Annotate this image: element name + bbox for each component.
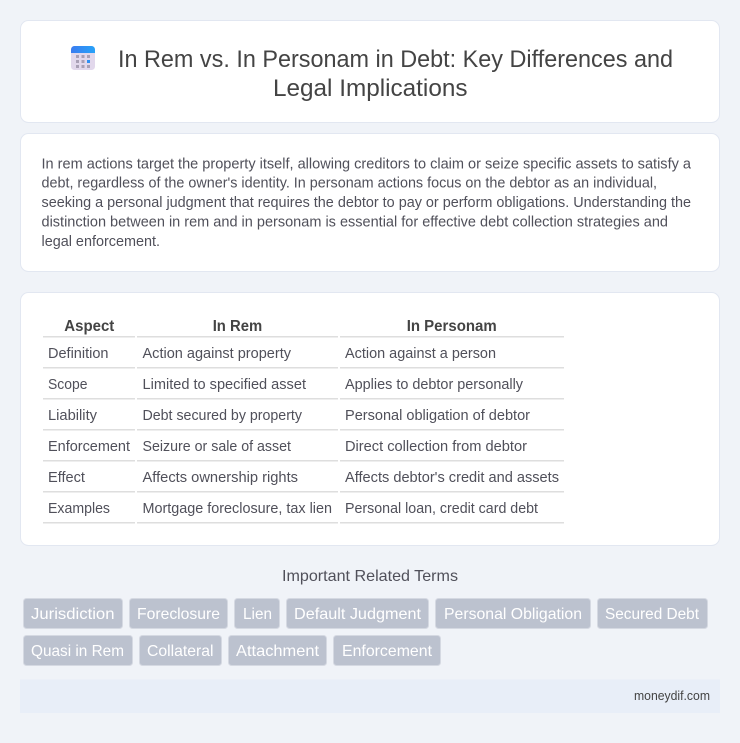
table header row: In Personam [407,318,497,335]
tag: personal obligation: Personal Obligation [444,606,582,623]
tag: attachment: Attachment [236,643,320,660]
table row: liability: Liability [48,408,98,424]
tag: jurisdiction: Jurisdiction [31,606,114,623]
table row: liability: Debt secured by property [142,408,303,424]
table header row [64,318,497,335]
tag: collateral [140,636,222,666]
table row: examples: Mortgage foreclosure, tax lien [142,501,332,517]
text block: introduction paragraph [42,156,691,250]
table row: scope: Applies to debtor personally [345,377,524,393]
tag: secured debt: Secured Debt [605,606,700,623]
footer credit: moneydif.com [634,689,710,703]
tag: personal obligation [436,598,590,628]
table row: examples [48,501,538,517]
tag: lien: Lien [243,606,272,623]
title [118,46,673,102]
tag: quasi in rem [24,636,132,666]
tag: enforcement [334,636,440,666]
panel: comparison table [20,292,720,546]
table header row: In Rem [213,318,262,335]
table row: scope: Limited to specified asset [142,377,306,393]
table row: examples: Personal loan, credit card debt [345,501,538,517]
tag: secured debt [598,598,708,628]
text block: introduction paragraph: legal enforcement. [42,234,160,250]
tag: default judgment: Default Judgment [294,606,422,623]
footer bar [20,680,720,713]
table row: effect [48,470,559,486]
table row: scope [48,377,524,393]
panel: related term tags [24,598,708,666]
text block: introduction paragraph: seeking a personal judgment that requires the debtor to pay or perform obligations. Understanding the [42,195,691,211]
heading: important related terms: Important Related Terms [282,568,458,585]
title: Legal Implications [273,75,468,102]
table row: effect: Affects debtor's credit and assets [345,470,559,486]
tag: foreclosure: Foreclosure [137,606,220,623]
table row: definition: Action against property [142,346,292,362]
tag: default judgment [286,598,428,628]
table header row: Aspect [64,318,114,335]
table row: enforcement [48,439,527,455]
panel: introduction [20,134,720,272]
tag: attachment [228,636,326,666]
text block: introduction paragraph: In rem actions target the property itself, allowing creditors to claim or seize specific assets to satisfy a [42,156,691,172]
table row: liability [48,408,530,424]
tag: collateral: Collateral [147,643,214,660]
tag: jurisdiction [24,598,122,628]
icon: calendar [71,46,95,70]
title: In Rem vs. In Personam in Debt: Key Differences and [118,46,673,73]
table row: definition: Action against a person [345,346,496,362]
table row: examples: Examples [48,501,110,517]
table row: definition [48,346,496,362]
table row: scope: Scope [48,377,88,393]
tag: foreclosure [130,598,228,628]
panel: title header [20,20,720,122]
text block: introduction paragraph: distinction between in rem and in personam is essential for effective debt collection strategies and [42,214,668,230]
table row: definition: Definition [48,346,108,362]
table row: effect: Affects ownership rights [142,470,298,486]
tag: enforcement: Enforcement [342,643,433,660]
table row: enforcement: Seizure or sale of asset [142,439,291,455]
table row: liability: Personal obligation of debtor [345,408,530,424]
tag: lien [234,598,280,628]
table row: effect: Effect [48,470,85,486]
table row: enforcement: Direct collection from debtor [345,439,527,455]
table row: enforcement: Enforcement [48,439,130,455]
tag: quasi in rem: Quasi in Rem [31,643,124,660]
text block: introduction paragraph: debt, regardless of the owner's identity. In personam actions focus on the debtor as an individual, [42,176,657,192]
